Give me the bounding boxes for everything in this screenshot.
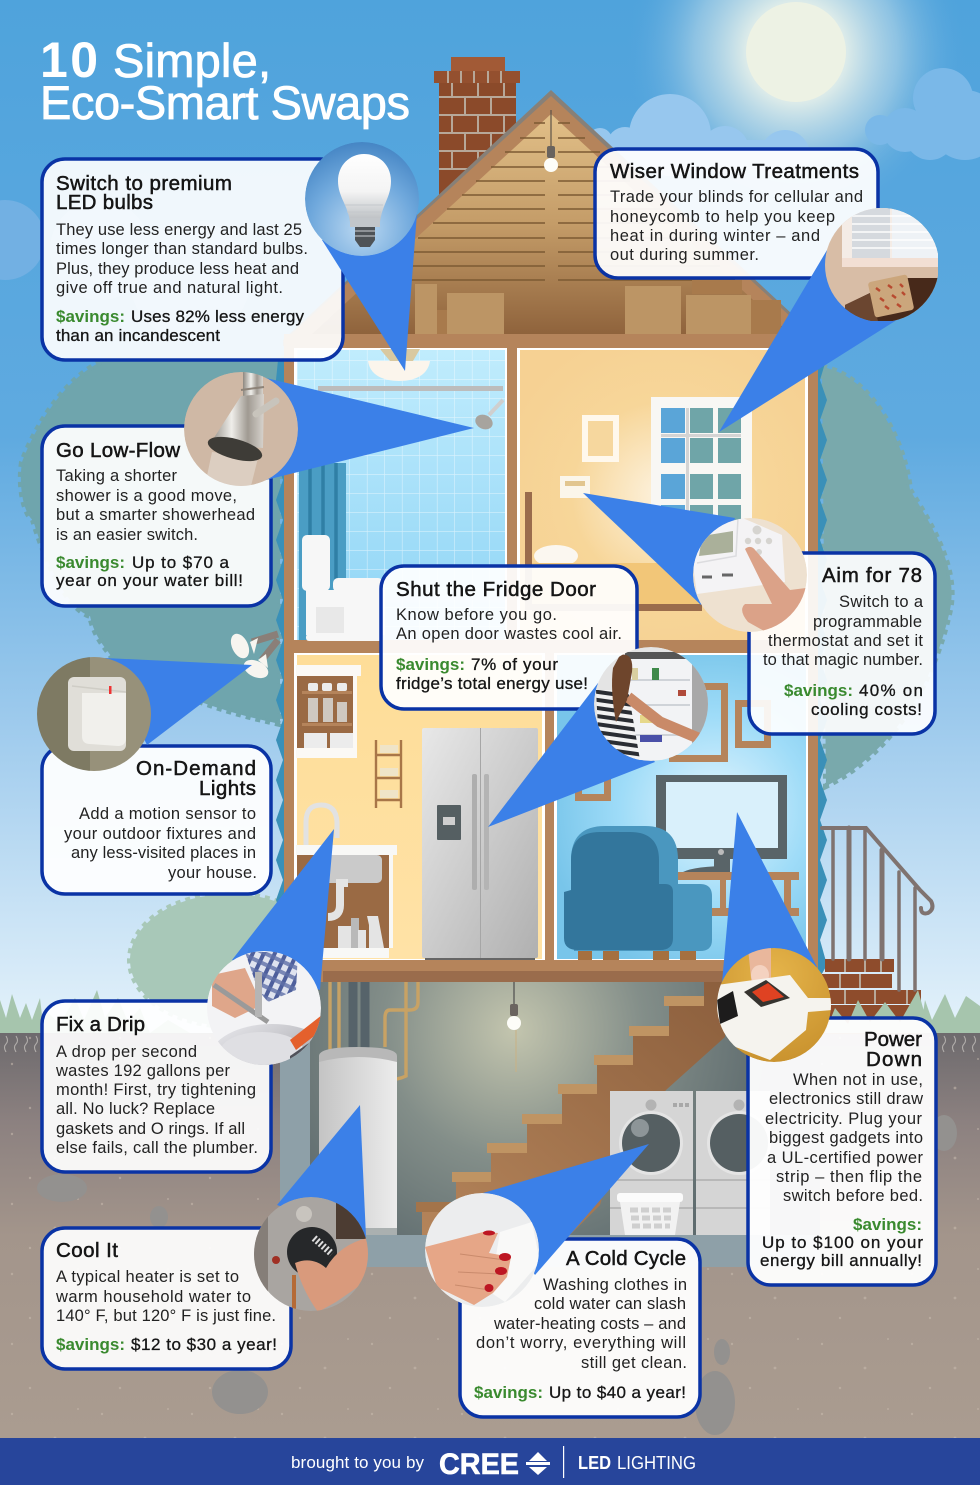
callout: LED bulbs: Plus, they produce less heat and <box>56 260 299 278</box>
callout: power down: Down <box>866 1048 922 1071</box>
pipes <box>330 982 418 1080</box>
callout: power down: biggest gadgets into <box>769 1129 923 1147</box>
callout: cold cycle: Washing clothes in <box>543 1276 687 1294</box>
icon: thermostat photo <box>693 516 807 632</box>
callout: window treatments: Trade your blinds for cellular and <box>610 188 863 206</box>
callout: window treatments: honeycomb to help you keep <box>610 208 835 226</box>
callout: cool it: $avings: <box>56 1335 125 1354</box>
pointer: shower <box>262 377 474 481</box>
callout: power down: energy bill annually! <box>760 1251 922 1270</box>
callout: low-flow shower: shower is a good move, <box>56 487 237 505</box>
callout: power down: strip – then flip the <box>776 1168 922 1186</box>
callout: low-flow shower: Taking a shorter <box>56 467 178 485</box>
basement <box>280 982 820 1267</box>
picture frames <box>578 686 768 798</box>
water heater <box>319 1047 397 1235</box>
callout: aim for 78: $avings: <box>784 681 853 700</box>
title <box>40 32 410 129</box>
title: Eco-Smart Swaps <box>40 76 410 129</box>
callout: power down: electronics still draw <box>769 1090 923 1108</box>
callout: aim for 78: thermostat and set it <box>768 632 923 650</box>
sun <box>626 0 966 222</box>
staircase <box>416 982 725 1235</box>
callout: power down: switch before bed. <box>783 1187 923 1205</box>
grass <box>0 990 980 1033</box>
ground <box>0 1033 980 1439</box>
tree: left <box>21 358 330 1026</box>
callout: fridge door: Shut the Fridge Door <box>396 578 596 601</box>
callout: power down <box>748 1018 936 1285</box>
callout: fix a drip: else fails, call the plumber. <box>56 1139 258 1157</box>
porch steps and railing <box>822 828 932 1034</box>
toilet <box>302 535 385 641</box>
callout: aim for 78: Aim for 78 <box>822 564 922 587</box>
attic bulb <box>544 110 558 172</box>
wall picture <box>582 415 619 462</box>
callout: on-demand lights: any less-visited places in <box>71 844 256 862</box>
callout: LED bulbs: times longer than standard bulbs. <box>56 240 308 258</box>
callout: fridge door: fridge’s total energy use! <box>396 674 588 693</box>
wall rack <box>376 740 401 808</box>
callout: window treatments: out during summer. <box>610 246 759 264</box>
upper cabinet <box>296 665 361 758</box>
television <box>656 775 787 872</box>
callout: LED bulbs: Switch to premium <box>56 172 232 195</box>
callout: low-flow shower: Go Low-Flow <box>56 439 180 462</box>
shower head <box>473 400 503 432</box>
callout: cold cycle: don’t worry, everything will <box>476 1334 686 1352</box>
footer band: LIGHTING <box>617 1452 696 1473</box>
sky background <box>0 0 980 1040</box>
logo: CREE: CREE <box>439 1448 519 1481</box>
pointer: motion sensor <box>105 658 252 745</box>
outdoor flood lights <box>227 631 278 682</box>
bathroom <box>294 348 507 641</box>
callout: LED bulbs: than an incandescent <box>56 326 220 345</box>
pointer: fridge <box>488 683 655 827</box>
ceiling lamp <box>368 349 430 381</box>
callout: cold cycle: still get clean. <box>581 1354 687 1372</box>
callout: window treatments: heat in during winter – and <box>610 227 820 245</box>
callout: fix a drip: Fix a Drip <box>56 1013 145 1036</box>
attic and roof <box>283 90 820 346</box>
pointer: washer <box>483 1144 649 1275</box>
callout: window treatments: Wiser Window Treatments <box>610 160 859 183</box>
callout: power down: Power <box>864 1028 922 1051</box>
callout: power down: electricity. Plug your <box>765 1110 922 1128</box>
callout: low-flow shower: is an easier switch. <box>56 526 198 544</box>
callout: LED bulbs <box>42 159 343 360</box>
callout: on-demand lights: On-Demand <box>136 757 256 780</box>
callout: cold cycle: cold water can slash <box>534 1295 686 1313</box>
icon: open fridge photo <box>594 647 710 765</box>
callout: cold cycle <box>460 1239 700 1417</box>
callout: cold cycle: water-heating costs – and <box>493 1315 686 1333</box>
callout: LED bulbs: give off true and natural light. <box>56 279 283 297</box>
sink and counter <box>296 805 397 958</box>
thermostat on wall <box>560 476 590 498</box>
callout: cold cycle: $avings: <box>474 1383 543 1402</box>
pointer: thermostat <box>583 493 735 605</box>
house shell <box>276 334 827 984</box>
callout: on-demand lights: Add a motion sensor to <box>79 805 256 823</box>
icon: showerhead photo <box>184 372 298 490</box>
refrigerator <box>422 728 538 960</box>
pointer: faucet <box>232 829 334 990</box>
callout: low-flow shower <box>42 426 271 606</box>
icon: cold wash photo <box>425 1193 540 1307</box>
chimney <box>434 57 520 200</box>
callout: fridge door: Know before you go. <box>396 606 557 624</box>
callout: cool it: warm household water to <box>55 1288 251 1306</box>
title: Simple, <box>113 34 271 87</box>
media table <box>678 872 799 916</box>
washer and dryer <box>610 1091 771 1235</box>
callout: power down: Up to $100 on your <box>762 1233 923 1252</box>
callout: LED bulbs: Uses 82% less energy <box>131 307 304 326</box>
callout: on-demand lights <box>42 746 271 894</box>
armchair <box>564 826 712 960</box>
callout: LED bulbs: $avings: <box>56 307 125 326</box>
callout: window treatments <box>595 149 878 278</box>
callout: cool it: 140° F, but 120° F is just fine. <box>56 1307 276 1325</box>
basement bulb <box>507 982 521 1072</box>
footer band: brought to you by <box>291 1453 424 1472</box>
curtain <box>299 463 346 640</box>
callout: LED bulbs: They use less energy and last 25 <box>56 221 302 239</box>
callout: cool it <box>42 1228 291 1369</box>
callout: low-flow shower: $avings: <box>56 553 125 572</box>
callout: aim for 78: Switch to a <box>839 593 924 611</box>
callout: fix a drip: A drop per second <box>56 1043 197 1061</box>
pointer: power strip <box>722 812 817 983</box>
tree: right <box>822 367 952 786</box>
title: 10 <box>40 32 98 88</box>
callout: fix a drip: gaskets and O rings. If all <box>56 1120 245 1138</box>
bedroom window <box>651 397 752 547</box>
callout: cool it: Cool It <box>56 1239 118 1262</box>
icon: water heater dial photo <box>254 1197 368 1312</box>
callout: fix a drip: all. No luck? Replace <box>56 1100 215 1118</box>
callout: cold cycle: A Cold Cycle <box>566 1247 686 1270</box>
icon: LED bulb photo <box>305 142 419 256</box>
footer band <box>0 1438 980 1485</box>
callout: fridge door <box>381 566 637 709</box>
callout: fridge door: $avings: <box>396 655 465 674</box>
pointer: water heater <box>277 1105 366 1237</box>
living room <box>554 653 808 960</box>
grass in front of steps <box>825 990 930 1033</box>
callout: aim for 78: to that magic number. <box>763 651 923 669</box>
callout: power down: a UL-certified power <box>767 1149 924 1167</box>
clouds <box>0 68 980 340</box>
pointer: window <box>719 245 900 432</box>
callout: cold cycle: Up to $40 a year! <box>549 1383 686 1402</box>
callout: low-flow shower: Up to $70 a <box>132 553 230 572</box>
callout: aim for 78: cooling costs! <box>811 700 922 719</box>
shower rod <box>318 386 503 391</box>
icon: window treatment photo <box>825 208 938 321</box>
icon: dripping faucet photo <box>207 951 321 1065</box>
callout: power down: When not in use, <box>793 1071 923 1089</box>
callout: aim for 78: programmable <box>813 613 922 631</box>
callout: low-flow shower: year on your water bill! <box>56 571 243 590</box>
callout: cool it: $12 to $30 a year! <box>131 1335 277 1354</box>
laundry basket <box>617 1193 683 1235</box>
callout: aim for 78: 40% on <box>859 681 923 700</box>
callout: fix a drip: month! First, try tightening <box>56 1081 256 1099</box>
footer band: LED <box>578 1452 611 1473</box>
callout: fix a drip <box>42 1001 271 1172</box>
pointer: LED bulb <box>322 200 418 371</box>
callout: low-flow shower: but a smarter showerhead <box>56 506 255 524</box>
callout: aim for 78 <box>749 553 935 734</box>
icon: motion sensor photo <box>37 657 152 771</box>
callout: fridge door: 7% of your <box>471 655 558 674</box>
callout: LED bulbs: LED bulbs <box>56 191 153 214</box>
callout: fridge door: An open door wastes cool air. <box>396 625 622 643</box>
callout: fix a drip: wastes 192 gallons per <box>55 1062 230 1080</box>
kitchen <box>294 653 545 960</box>
callout: power down: $avings: <box>853 1215 922 1234</box>
bed <box>525 492 702 611</box>
bedroom <box>517 348 808 640</box>
roots <box>4 1036 976 1052</box>
icon: power strip photo <box>717 948 832 1062</box>
callout: on-demand lights: your outdoor fixtures and <box>64 825 256 843</box>
callout: on-demand lights: your house. <box>168 864 257 882</box>
callout: cool it: A typical heater is set to <box>56 1268 239 1286</box>
callout: on-demand lights: Lights <box>199 777 256 800</box>
